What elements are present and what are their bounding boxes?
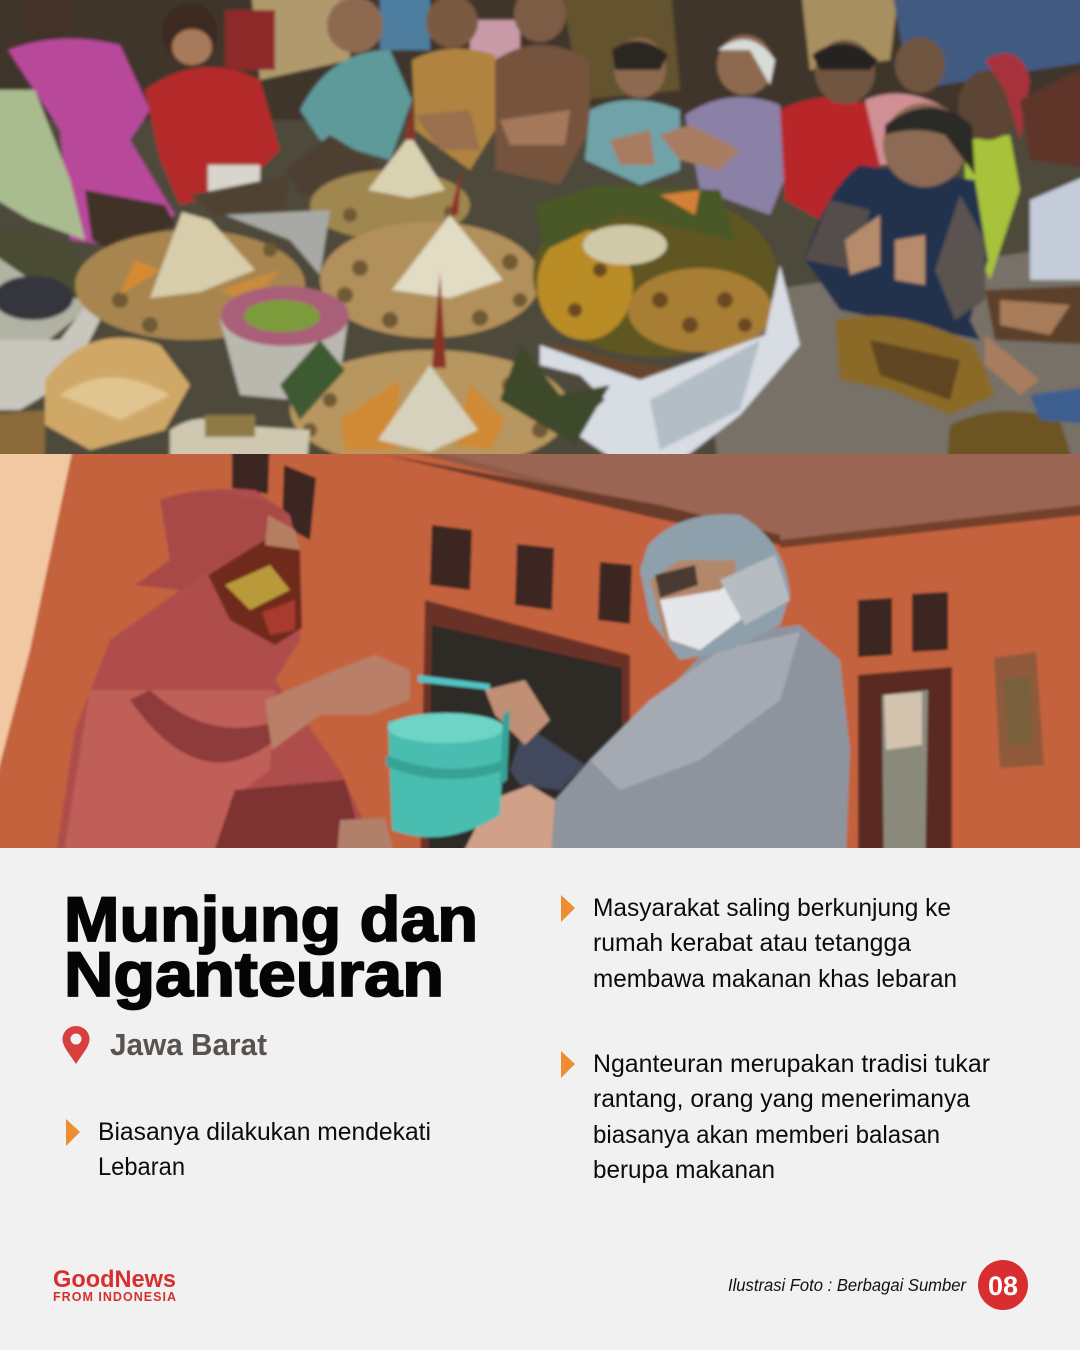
lavender woman, white hijab	[685, 97, 788, 215]
logo: GoodNews from Indonesia: GoodNews	[53, 1266, 176, 1293]
bullet: exchanging food containers: berupa makanan	[593, 1156, 775, 1184]
logo: GoodNews from Indonesia: FROM INDONESIA	[53, 1290, 176, 1304]
location label: Jawa Barat	[110, 1027, 267, 1062]
woman left: red dress	[56, 487, 362, 848]
patterned mask	[208, 540, 302, 645]
white cloth	[537, 264, 802, 454]
page number badge	[978, 1260, 1028, 1310]
crackers	[45, 338, 190, 450]
main woman in blue	[805, 165, 988, 340]
hands	[485, 680, 550, 745]
icon: orange arrow	[66, 1119, 80, 1146]
bullet: exchanging food containers: biasanya akan memberi balasan	[593, 1121, 940, 1149]
bullet: exchanging food containers	[561, 1050, 990, 1184]
right door	[856, 666, 954, 848]
bullet: timing: Biasanya dilakukan mendekati	[98, 1118, 431, 1146]
bowl of vegetables	[220, 320, 348, 400]
bullet: visiting relatives: membawa makanan khas lebaran	[593, 965, 957, 993]
photo: communal feast with seated women	[0, 0, 1080, 484]
title: Munjung dan	[64, 885, 478, 955]
mask and glasses	[658, 586, 742, 652]
doorway	[420, 600, 630, 878]
icon: orange arrow	[561, 1051, 575, 1078]
food spread	[75, 230, 305, 340]
red woman right	[780, 98, 880, 220]
left figure green	[0, 90, 85, 240]
banana and fruit tray	[545, 334, 764, 378]
window vents	[230, 454, 271, 496]
title	[64, 885, 478, 1010]
back row	[250, 0, 350, 80]
hijab	[640, 514, 790, 660]
bullet: visiting relatives	[561, 894, 957, 993]
icon: location pin	[62, 1026, 90, 1064]
left arm	[265, 655, 410, 750]
bullet: exchanging food containers: Nganteuran merupakan tradisi tukar	[593, 1050, 990, 1078]
tumpeng cones	[150, 212, 255, 298]
bullet: visiting relatives: rumah kerabat atau tetangga	[593, 929, 911, 957]
bullet: timing: Lebaran	[98, 1153, 185, 1181]
page number badge: 08	[988, 1271, 1018, 1301]
brown woman	[495, 45, 590, 185]
bullet: exchanging food containers: rantang, orang yang menerimanya	[593, 1085, 970, 1113]
bullet: visiting relatives: Masyarakat saling berkunjung ke	[593, 894, 951, 922]
bullet: timing	[66, 1118, 431, 1181]
pink woman	[8, 39, 175, 245]
teal woman	[300, 50, 412, 160]
wall frame	[994, 652, 1044, 768]
light blue woman	[585, 100, 680, 185]
teal container	[388, 714, 505, 837]
woman right: grey top	[550, 623, 852, 848]
red woman	[145, 67, 280, 205]
photo: two women exchanging a food container	[0, 454, 1080, 848]
icon: orange arrow	[561, 895, 575, 922]
photo credit: Ilustrasi Foto : Berbagai Sumber	[728, 1275, 967, 1295]
leaves	[500, 345, 610, 445]
green woman	[965, 135, 1020, 280]
title: Nganteuran	[64, 940, 444, 1010]
ochre woman	[412, 49, 495, 170]
